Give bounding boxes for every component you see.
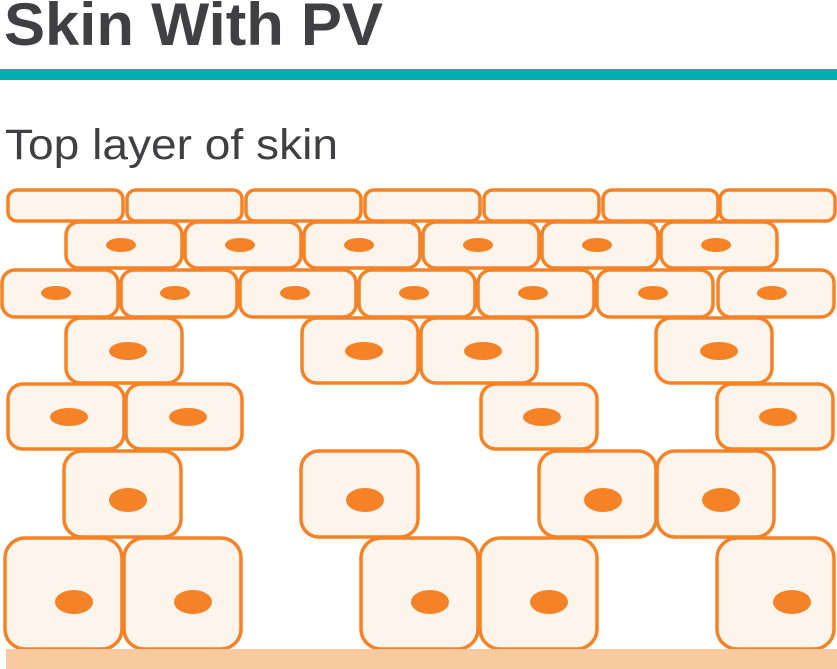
skin cells illustration: [2, 190, 835, 649]
teal divider bar: [0, 69, 837, 80]
row 1: flat top cells: [8, 190, 835, 221]
row 4 cells: [66, 318, 772, 383]
row 3 cells: [2, 270, 834, 317]
base membrane: [6, 649, 837, 669]
row 7 basal cells: [5, 538, 834, 649]
subtitle: Top layer of skin: [5, 121, 338, 169]
row 6 cells: [64, 451, 774, 537]
row 2 cells: [66, 222, 777, 268]
row 5 cells: [8, 384, 833, 449]
nuclei: [41, 238, 811, 614]
